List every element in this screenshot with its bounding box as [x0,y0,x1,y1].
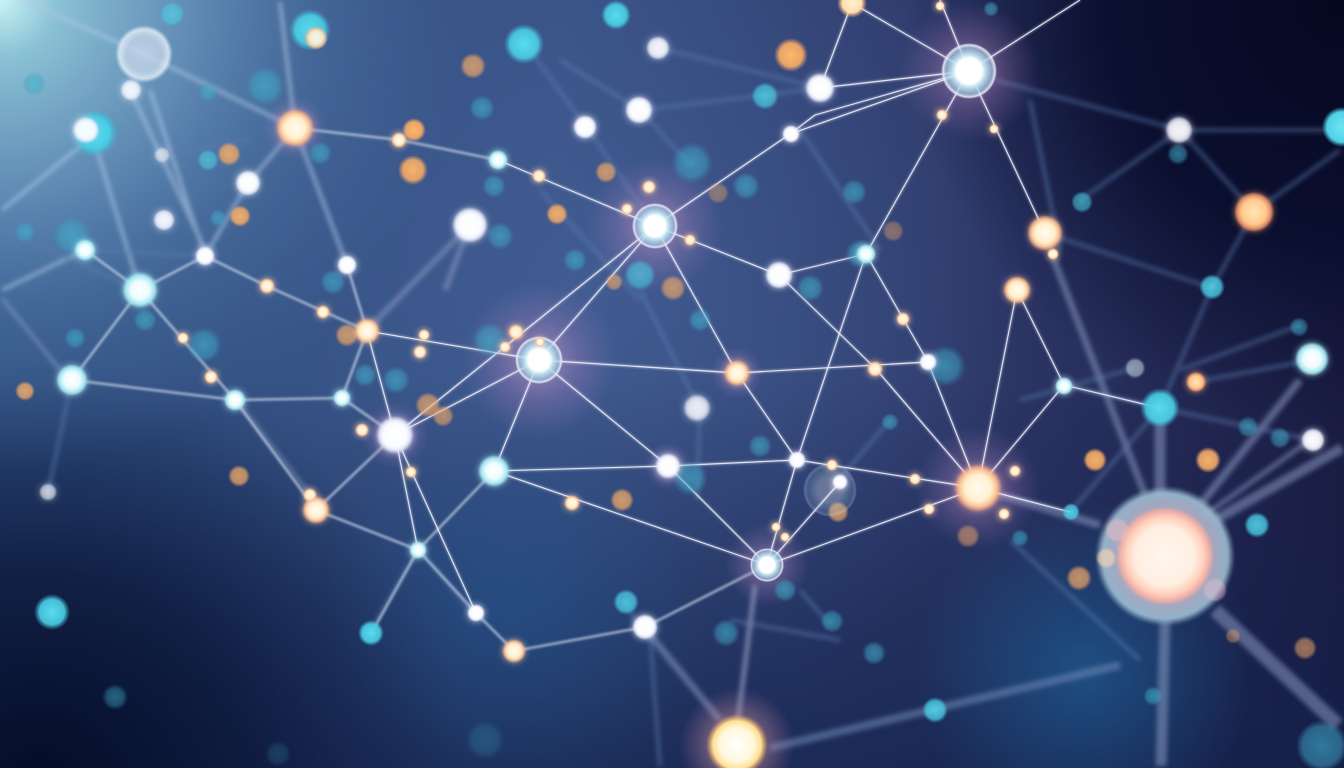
warm node, top edge [837,0,867,18]
pink halos behind hubs [263,1,1040,607]
large warm hub, lower right [1095,486,1235,626]
foreground thin links [367,0,1160,613]
orange bokeh dots [15,26,1317,660]
soft mid links on the left [72,128,767,651]
glowing node, bottom edge [679,687,795,768]
small orange sparks [177,1,1059,542]
warm glowing nodes [276,109,1274,663]
bright white nodes [39,36,1329,640]
glass hub nodes [115,25,997,582]
